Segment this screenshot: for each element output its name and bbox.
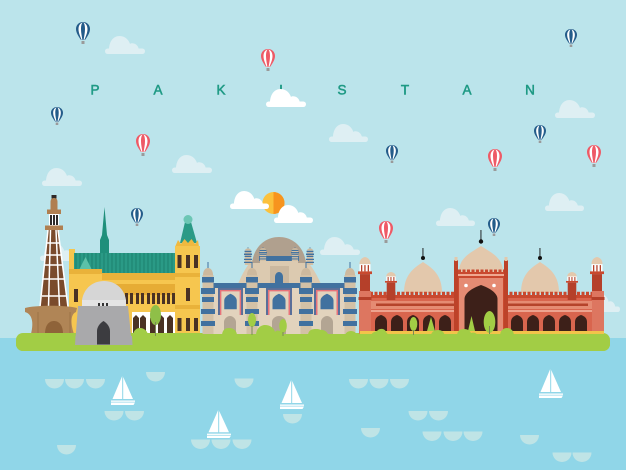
Minar-e-Pakistan (25, 195, 77, 334)
ground (16, 333, 610, 351)
title: PAKISTAN: T (401, 82, 409, 98)
hot air balloons (51, 22, 601, 243)
waves (45, 372, 592, 462)
title: PAKISTAN: I (279, 82, 283, 98)
Central tomb (Jahangir) (201, 237, 357, 334)
mausoleum door base (97, 336, 110, 344)
Badshahi Mosque (358, 230, 604, 334)
Frere Hall (69, 207, 200, 334)
title: PAKISTAN: N (525, 82, 535, 98)
sun with clouds (230, 191, 313, 223)
title: PAKISTAN: K (216, 82, 226, 98)
title: PAKISTAN: S (337, 82, 347, 98)
sailboats (111, 369, 563, 438)
sky background (0, 0, 626, 338)
title: PAKISTAN: P (90, 82, 100, 98)
trees and bushes (133, 305, 514, 344)
title: PAKISTAN: A (462, 82, 472, 98)
mausoleum base (75, 336, 132, 345)
Mausoleum (Mazar-e-Quaid) (75, 281, 132, 345)
ground strip over building bases (16, 336, 610, 351)
pale clouds (40, 36, 620, 312)
title: PAKISTAN (90, 82, 535, 98)
title: PAKISTAN: A (153, 82, 163, 98)
water (0, 338, 626, 470)
white clouds (266, 89, 306, 107)
